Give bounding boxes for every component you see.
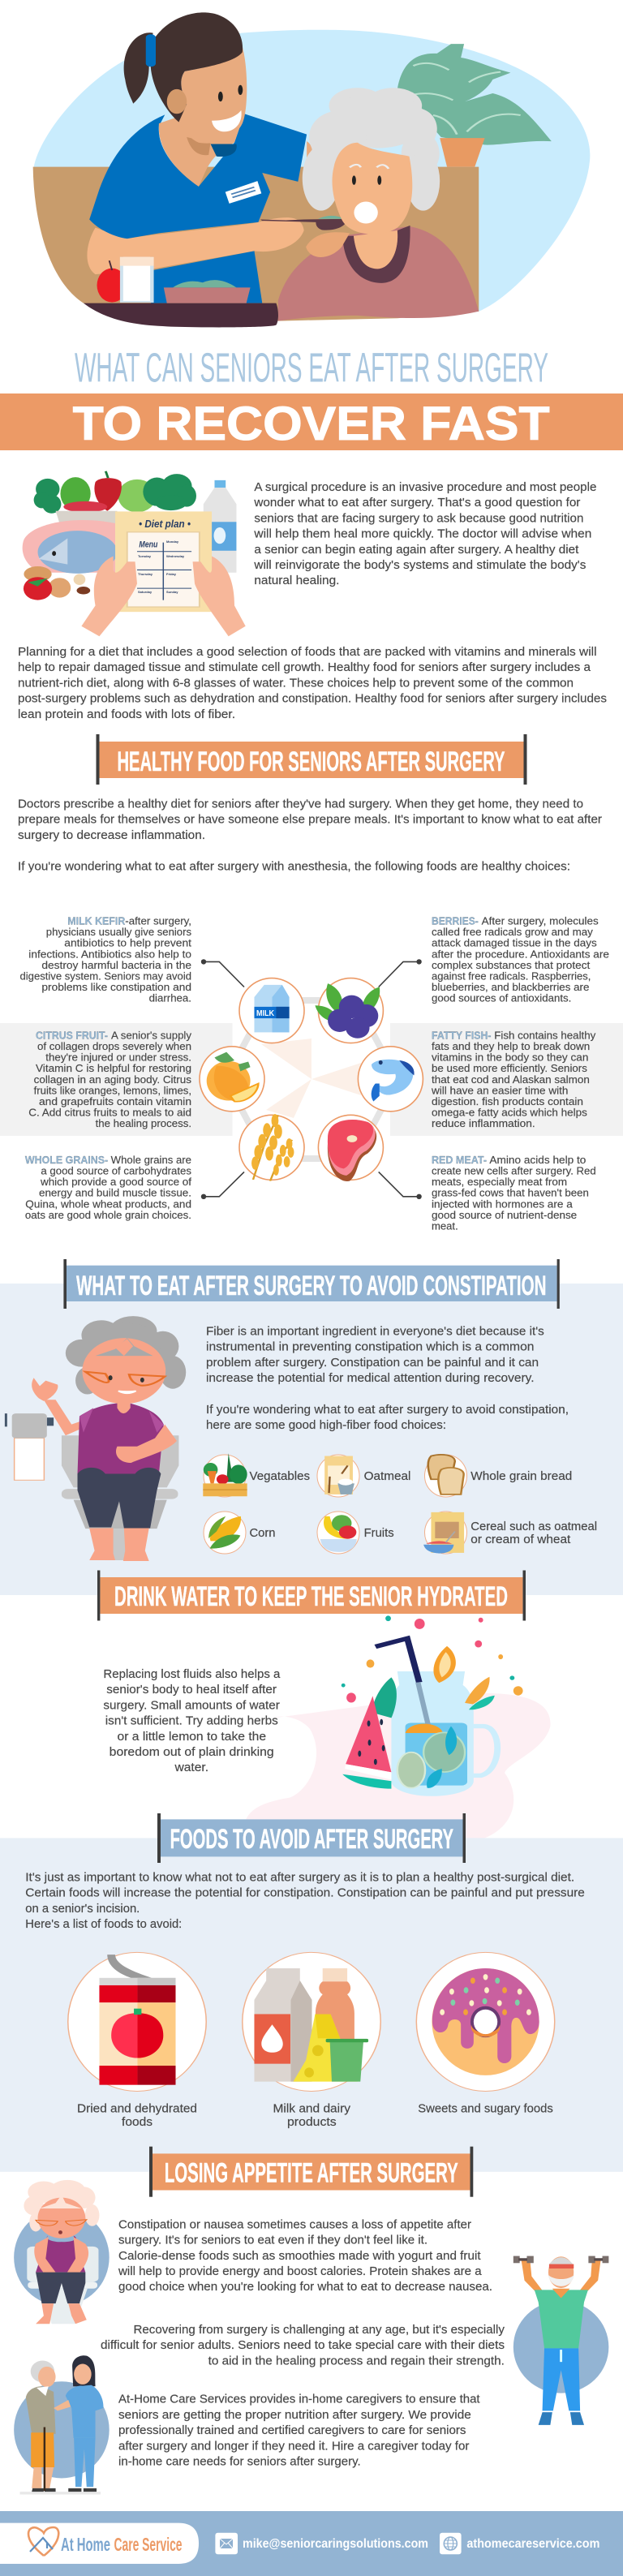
planning paragraph [18,646,607,721]
labels: high fiber foods: Vegatables [250,1470,310,1483]
intro paragraph: wonder what to eat after surgery. That's a good question for [253,497,581,510]
text: fiber paragraph: increase the potential for medical attention during recovery. [206,1372,534,1385]
text: berries: attack damaged tissue in the days [432,938,597,949]
heading: hydrated [97,1571,526,1621]
contact: email [215,2533,428,2554]
text: citrus fruit: the healing process. [96,1118,191,1129]
icon: donut [416,1952,555,2091]
heading: foods to avoid [157,1813,466,1863]
text: whole grains: energy and build muscle tissue. [39,1188,191,1199]
intro paragraph: will reinvigorate the body's systems and stimulate the body's [253,559,586,572]
labels: high fiber foods: Oatmeal [364,1470,410,1483]
text: constipation or nausea: good choice when you're looking for what to eat to decrease nausea. [118,2281,492,2294]
heading: healthy food [96,734,527,785]
labels: high fiber foods: Fruits [364,1527,394,1540]
text: fatty fish: fats and they help to break down [432,1041,590,1052]
text: milk kefir: physicians usually give seniors [46,927,191,938]
text: recovering from surgery: to aid in the healing process and regain their strength. [208,2355,505,2367]
illustration: man lifting dumbbells [513,2256,608,2425]
intro paragraph: A surgical procedure is an invasive procedure and most people [254,481,596,494]
intro paragraph: seniors that are facing surgery to ask because good nutrition [254,512,583,525]
text: citrus fruit: C. Add citrus fruits to meals to aid [28,1107,191,1119]
icons: high fiber foods [203,1453,467,1554]
text: fatty fish: Fish contains healthy [494,1030,596,1041]
text: berries: BERRIES- [432,915,479,927]
footer [0,2511,623,2576]
panel: constipation background [0,1284,623,1595]
text: citrus fruit: A senior's supply [111,1030,192,1041]
text: citrus fruit: CITRUS FRUIT- [36,1030,108,1041]
planning paragraph: Planning for a diet that includes a good selection of foods that are packed with vitamins and minerals will [18,646,597,659]
labels: high fiber foods: or cream of wheat [470,1533,570,1546]
title [0,345,623,450]
contact: website [440,2533,599,2554]
labels: high fiber foods: Cereal such as oatmeal [470,1520,597,1533]
icon: citrus [207,1052,258,1102]
icon: red meat [328,1120,376,1181]
labels: foods to avoid [77,2103,553,2129]
text: constipation or nausea: surgery. It's for seniors to eat even if they don't feel like it. [118,2234,428,2247]
illustration: diet plan: Thursday [138,572,153,576]
text: at-home care services: professionally trained and certified caregivers to care for seniors [118,2424,466,2437]
text: fiber paragraph: here are some good high-fiber food choices: [206,1419,446,1432]
text: recovering from surgery: Recovering from surgery is challenging at any age, but it's especially [133,2324,505,2337]
text: red meat: injected with hormones are a [432,1198,573,1210]
illustration: diet plan: • Diet plan • [139,518,191,530]
text: at-home care services: after surgery and longer if they need it. Hire a caregiver today for [118,2440,470,2453]
text: milk kefir: problems like constipation and [41,982,191,993]
planning paragraph: post-surgery problems such as dehydration and constipation. Healthy food for seniors after surgery includes [18,693,607,706]
icon: milk and dairy [243,1952,380,2091]
icon: cereal [423,1512,464,1554]
text: milk kefir: infections. Antibiotics also help to [28,948,191,960]
text: recovering from surgery [101,2324,505,2367]
text: foods to avoid intro [25,1871,585,1931]
text: red meat: grass-fed cows that haven't been [432,1188,589,1199]
text: milk kefir: antibiotics to help prevent [64,938,192,949]
text: red meat: Amino acids help to [489,1155,586,1166]
text: whole grains: a good source of carbohydrates [41,1165,191,1176]
text: whole grains: which provide a good source of [40,1176,192,1188]
labels: high fiber foods: Corn [250,1527,276,1540]
labels: foods to avoid: Sweets and sugary foods [418,2103,553,2116]
text: citrus fruit: of collagen drops severely when [37,1041,191,1052]
text: milk kefir: -after surgery, [125,915,191,927]
illustration: diet plan: Sunday [166,590,178,594]
text: milk kefir: destroy harmful bacteria in the [41,960,191,971]
text: replacing fluids: water. [174,1761,208,1774]
text: foods to avoid intro: Here's a list of foods to avoid: [25,1918,182,1931]
text: citrus fruit: Vitamin C is helpful for restoring [36,1063,191,1074]
text: berries: called free radicals grow and may [432,927,594,938]
text: fatty fish: reduce inflammation. [432,1118,535,1129]
intro paragraph [253,481,596,587]
text: fatty fish: omega-e fatty acids which helps [432,1107,587,1119]
text: berries: against free radicals. Raspberries, [432,970,591,982]
text: constipation or nausea: Constipation or nausea sometimes causes a loss of appetite after [118,2218,471,2231]
text: milk kefir: MILK KEFIR [67,915,125,927]
text: constipation or nausea: will help to provide energy and boost calories. Protein shakes are a [118,2265,483,2278]
doctors paragraph: surgery to decrease inflammation. [18,829,205,842]
text: replacing fluids: boredom out of plain drinking [110,1746,274,1759]
text: milk kefir [19,915,192,1004]
text: milk kefir: digestive system. Seniors may avoid [19,970,191,982]
icon: corn [208,1516,241,1549]
logo: Care Service [114,2534,182,2555]
text: citrus fruit: fruits like oranges, lemons, limes, [34,1085,191,1096]
text: fiber paragraph: instrumental in preventing constipation which is a common [206,1341,534,1354]
panel: foods to avoid background [0,1838,623,2172]
text: milk kefir: diarrhea. [149,993,191,1004]
icon: bread [428,1455,464,1494]
text: fatty fish: vitamins in the body so they can [432,1052,588,1064]
intro paragraph: will help them heal more quickly. The doctor will advise when [253,528,591,541]
text: at-home care services [118,2393,480,2468]
text: whole grains: oats are good whole grain choices. [25,1210,191,1221]
logo [0,2523,199,2564]
text: at-home care services: At-Home Care Services provides in-home caregivers to ensure that [118,2393,480,2406]
labels: foods to avoid: Dried and dehydrated [77,2103,197,2116]
text: at-home care services: seniors are getting the proper nutrition after surgery. We provide [118,2409,471,2422]
contact: website: athomecareservice.com [466,2537,599,2551]
icon: fruits [320,1515,357,1552]
icon: vegetables [203,1453,247,1496]
text: constipation or nausea [118,2218,492,2294]
text: replacing fluids: or a little lemon to take the [117,1731,266,1744]
text: citrus fruit: and grapefruits contain vitamin [39,1096,191,1107]
text: berries: After surgery, molecules [482,915,599,927]
labels: high fiber foods [250,1470,597,1546]
illustration: diet plan: Menu [139,540,158,550]
logo: At Home [61,2534,110,2555]
text: berries: good sources of antioxidants. [432,993,571,1004]
intro paragraph: natural healing. [254,574,339,587]
text: red meat: meat. [432,1220,458,1232]
text: foods to avoid intro: on a senior's incision. [25,1903,140,1916]
contact: email: mike@seniorcaringsolutions.com [243,2537,428,2551]
text: foods to avoid intro: It's just as important to know what not to eat after surgery as it is to plan a healthy post-surgical diet. [25,1871,574,1884]
doctors paragraph: prepare meals for themselves or have someone else prepare meals. It's important to know what to eat after [18,814,602,827]
text: fiber paragraph: Fiber is an important ingredient in everyone's diet because it's [206,1325,544,1338]
icon: canned and dried foods [68,1952,206,2091]
illustration: caregiver feeding senior [33,12,590,327]
illustration: senior woman with nausea [14,2180,110,2324]
labels: foods to avoid: foods [122,2116,153,2129]
text: red meat: meats, especially meat from [432,1176,567,1188]
text: fatty fish: that eat cod and Alaskan salmon [432,1074,590,1086]
illustration: caregiver with senior [14,2355,110,2495]
panel: healthy food diagram [0,959,623,1199]
text: red meat: good source of nutrient-dense [432,1210,577,1221]
text: fiber paragraph [206,1325,569,1432]
text: whole grains [25,1155,192,1221]
icon: fish [372,1060,415,1102]
illustration: diet plan: Friday [166,572,177,576]
text: berries: complex substances that protect [432,960,591,971]
illustration: diet plan: Tuesday [138,554,152,558]
text: whole grains: Quina, whole wheat products, and [25,1198,191,1210]
doctors paragraph: Doctors prescribe a healthy diet for seniors after they've had surgery. When they get home, they need to [18,798,583,811]
text: fatty fish: will have an easier time with [431,1085,568,1096]
text: red meat: create new cells after surgery. Red [432,1165,596,1176]
illustration: diet plan: Monday [166,540,179,544]
intro paragraph: a senior can begin eating again after surgery. A healthy diet [254,544,578,557]
doctors paragraph: If you're wondering what to eat after surgery with anesthesia, the following foods are healthy choices: [18,860,570,873]
illustration: senior woman on toilet [5,1316,186,1561]
text: at-home care services: in-home care needs for seniors after surgery. [118,2455,361,2468]
heading: losing appetite [149,2147,473,2197]
doctors paragraph [18,798,602,873]
text: replacing fluids: senior's body to heal itself after [106,1684,277,1697]
icon: milk carton [254,985,290,1032]
icon: berries [315,983,380,1039]
planning paragraph: lean protein and foods with lots of fiber. [18,708,235,721]
text: fiber paragraph: problem after surgery. Constipation can be painful and it can [206,1357,539,1370]
illustration: diet plan: Wednesday [166,554,185,558]
text: red meat [432,1155,596,1232]
text: whole grains: Whole grains are [111,1155,191,1166]
labels: foods to avoid: Milk and dairy [273,2103,351,2116]
planning paragraph: nutrient-rich diet, along with 6-8 glasses of water. These choices help to prevent some of the common [18,677,574,690]
illustration: diet plan: Saturday [138,590,153,594]
heading: constipation [63,1259,560,1309]
illustration: infused water jar [244,1615,550,1838]
labels: high fiber foods: Whole grain bread [470,1470,572,1483]
icon: wheat [251,1114,294,1181]
text: fatty fish [431,1030,596,1129]
text: fatty fish: digestion. fish products contain [432,1096,583,1107]
text: citrus fruit: they're injured or under stress. [45,1052,191,1064]
text: berries [432,915,609,1004]
text: fatty fish: FATTY FISH- [432,1030,492,1041]
labels: foods to avoid: products [287,2116,337,2129]
text: berries: blueberries, and blackberries are [432,982,589,993]
text: citrus fruit: collagen in an aging body. Citrus [34,1074,191,1086]
text: red meat: RED MEAT- [432,1155,487,1166]
text: constipation or nausea: Calorie-dense foods such as smoothies made with yogurt and fruit [118,2250,481,2263]
text: replacing fluids: isn't sufficient. Try adding herbs [105,1715,278,1728]
illustration: diet plan [23,471,246,636]
icon: oatmeal [324,1456,354,1494]
panel: healthy food diagram: MILK [256,1009,275,1018]
text: replacing fluids [103,1668,281,1774]
text: fatty fish: be used more efficiently. Seniors [432,1063,587,1074]
text: replacing fluids: Replacing lost fluids also helps a [103,1668,281,1681]
text: recovering from surgery: difficult for senior adults. Seniors need to take special care with their diets [101,2339,505,2352]
text: berries: after the procedure. Antioxidants are [432,948,609,960]
planning paragraph: help to repair damaged tissue and stimulate cell growth. Healthy food for seniors after surgery includes a [18,661,591,674]
text: replacing fluids: surgery. Small amounts of water [103,1699,280,1712]
text: whole grains: WHOLE GRAINS- [25,1155,108,1166]
text: foods to avoid intro: Certain foods will increase the potential for constipation. Constipation can be painful and put pressure [25,1887,585,1900]
text: citrus fruit [28,1030,192,1129]
text: fiber paragraph: If you're wondering what to eat after surgery to avoid constipation, [206,1404,569,1417]
title: TO RECOVER FAST [73,398,550,450]
